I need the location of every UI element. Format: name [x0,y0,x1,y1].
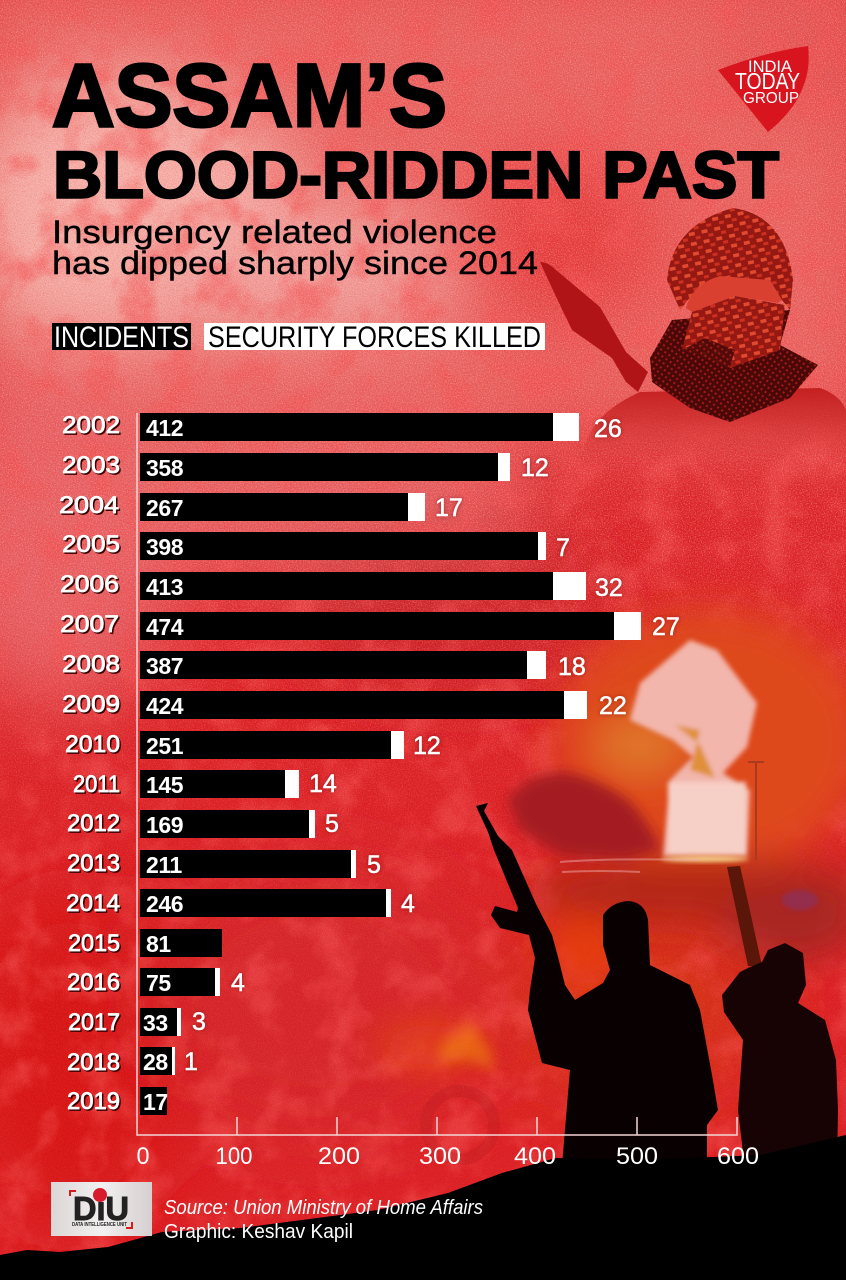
axis labels: 400 [514,1143,556,1170]
row 2018 [67,1047,198,1076]
row 2007: 474 [146,614,184,640]
row 2006: 413 [146,574,183,600]
flame by wrecked car [440,1024,496,1072]
row 2005: 398 [146,534,184,560]
row 2015: 2015 [68,930,120,957]
row 2011: 2011 [73,771,120,798]
row 2013: 5 [367,851,381,879]
headwrap [667,208,793,310]
row 2004 [59,492,463,522]
row 2011: 14 [309,770,337,798]
row 2010: 12 [413,732,441,760]
row 2016: 75 [146,970,171,996]
row 2012 [67,810,339,838]
axis labels: 600 [717,1143,759,1170]
row 2015: 81 [146,931,171,957]
row 2007: 27 [652,613,680,641]
row 2003 [62,452,549,482]
legend [52,321,545,354]
second militant [722,943,838,1170]
row 2017: 33 [143,1010,168,1036]
subtitle [52,214,538,281]
row 2012: 2012 [67,810,120,837]
row 2009: 2009 [62,691,120,718]
row 2009 [62,691,627,720]
rocket [540,262,648,392]
row 2006: 2006 [60,571,119,598]
row 2005: 7 [556,534,570,562]
row 2007: 2007 [60,611,119,638]
logo: India Today Group [718,46,809,132]
axis labels: 200 [318,1143,360,1170]
row 2014: 4 [401,890,415,918]
row 2012: 169 [146,812,183,838]
row 2019: 17 [143,1089,168,1115]
subtitle: Insurgency related violence [52,214,497,250]
wheel of wrecked car [426,1091,494,1159]
row 2003: 358 [146,455,184,481]
row 2008 [62,651,586,681]
title: BLOOD-RIDDEN PAST [53,138,779,212]
row 2010 [65,731,441,760]
legend: security forces killed: SECURITY FORCES KILLED [208,321,541,354]
row 2009: 22 [599,692,627,720]
logo: DIU Data Intelligence Unit: DiU [73,1190,129,1227]
row 2003: 2003 [62,452,120,479]
illustration: masked militant with rocket [540,208,846,460]
row 2004: 17 [435,494,463,522]
row 2006: 32 [595,574,623,602]
row 2011 [73,770,337,798]
subtitle: has dipped sharply since 2014 [52,245,538,281]
second militant gun [727,866,762,966]
row 2012: 5 [325,810,339,838]
row 2016 [67,968,245,997]
tree silhouette [508,773,660,860]
title: ASSAM’S [52,45,447,145]
source and credit: Graphic: Keshav Kapil [164,1221,353,1243]
logo: India Today Group: INDIA [748,57,793,76]
logo: DIU Data Intelligence Unit [51,1182,152,1236]
neck scarf [650,310,818,422]
axis [137,413,737,1135]
row 2013: 2013 [67,850,120,877]
axis labels: 0 [136,1143,150,1170]
axis labels: 300 [419,1143,461,1170]
axis labels: 100 [216,1143,252,1170]
row 2017: 2017 [68,1009,120,1036]
face mask [682,296,785,368]
row 2018: 2018 [67,1049,120,1076]
row 2008: 387 [146,653,183,679]
row 2002 [62,412,622,443]
logo: DIU Data Intelligence Unit: DATA INTELLIGENCE UNIT [72,1222,127,1228]
row 2002: 2002 [62,412,120,439]
row 2010: 251 [146,733,184,759]
row 2004: 267 [146,495,183,521]
row 2013 [67,850,381,879]
row 2017: 3 [192,1008,206,1036]
row 2016: 4 [231,969,245,997]
source and credit [164,1197,483,1243]
source and credit: Source: Union Ministry of Home Affairs [164,1197,483,1219]
first militant with rifle [476,803,718,1165]
row 2010: 2010 [65,731,120,758]
axis labels [136,1143,759,1170]
axis labels: 500 [616,1143,658,1170]
title [52,45,779,212]
body [585,388,846,460]
ground silhouette [0,1135,846,1280]
row 2013: 211 [146,852,183,878]
row 2008: 18 [558,653,586,681]
row 2014: 246 [146,891,183,917]
row 2008: 2008 [62,651,120,678]
bar chart: incidents and security forces killed by year [59,412,759,1170]
row 2019: 2019 [67,1088,120,1115]
eye band [686,276,782,312]
row 2002: 412 [146,415,183,441]
legend: incidents: INCIDENTS [54,321,189,354]
row 2005: 2005 [62,531,120,558]
row 2007 [60,611,680,641]
row 2019 [67,1087,168,1115]
fire [630,640,757,856]
row 2002: 26 [594,415,622,443]
row 2004: 2004 [59,492,119,519]
row 2009: 424 [146,693,184,719]
row 2011: 145 [146,772,184,798]
logo: India Today Group: GROUP [743,90,799,107]
row 2015 [68,929,222,957]
row 2018: 28 [143,1049,168,1075]
illustration: silhouettes of armed men [476,803,838,1170]
row 2014: 2014 [66,890,120,917]
row 2018: 1 [184,1048,198,1076]
row 2014 [66,889,415,918]
logo: India Today Group: TODAY [735,68,800,94]
distant car [782,890,818,910]
fire and smoke scene [380,610,846,1159]
row 2003: 12 [521,454,549,482]
row 2016: 2016 [67,969,120,996]
row 2017 [68,1008,206,1036]
row 2005 [62,531,570,562]
row 2006 [60,571,623,602]
